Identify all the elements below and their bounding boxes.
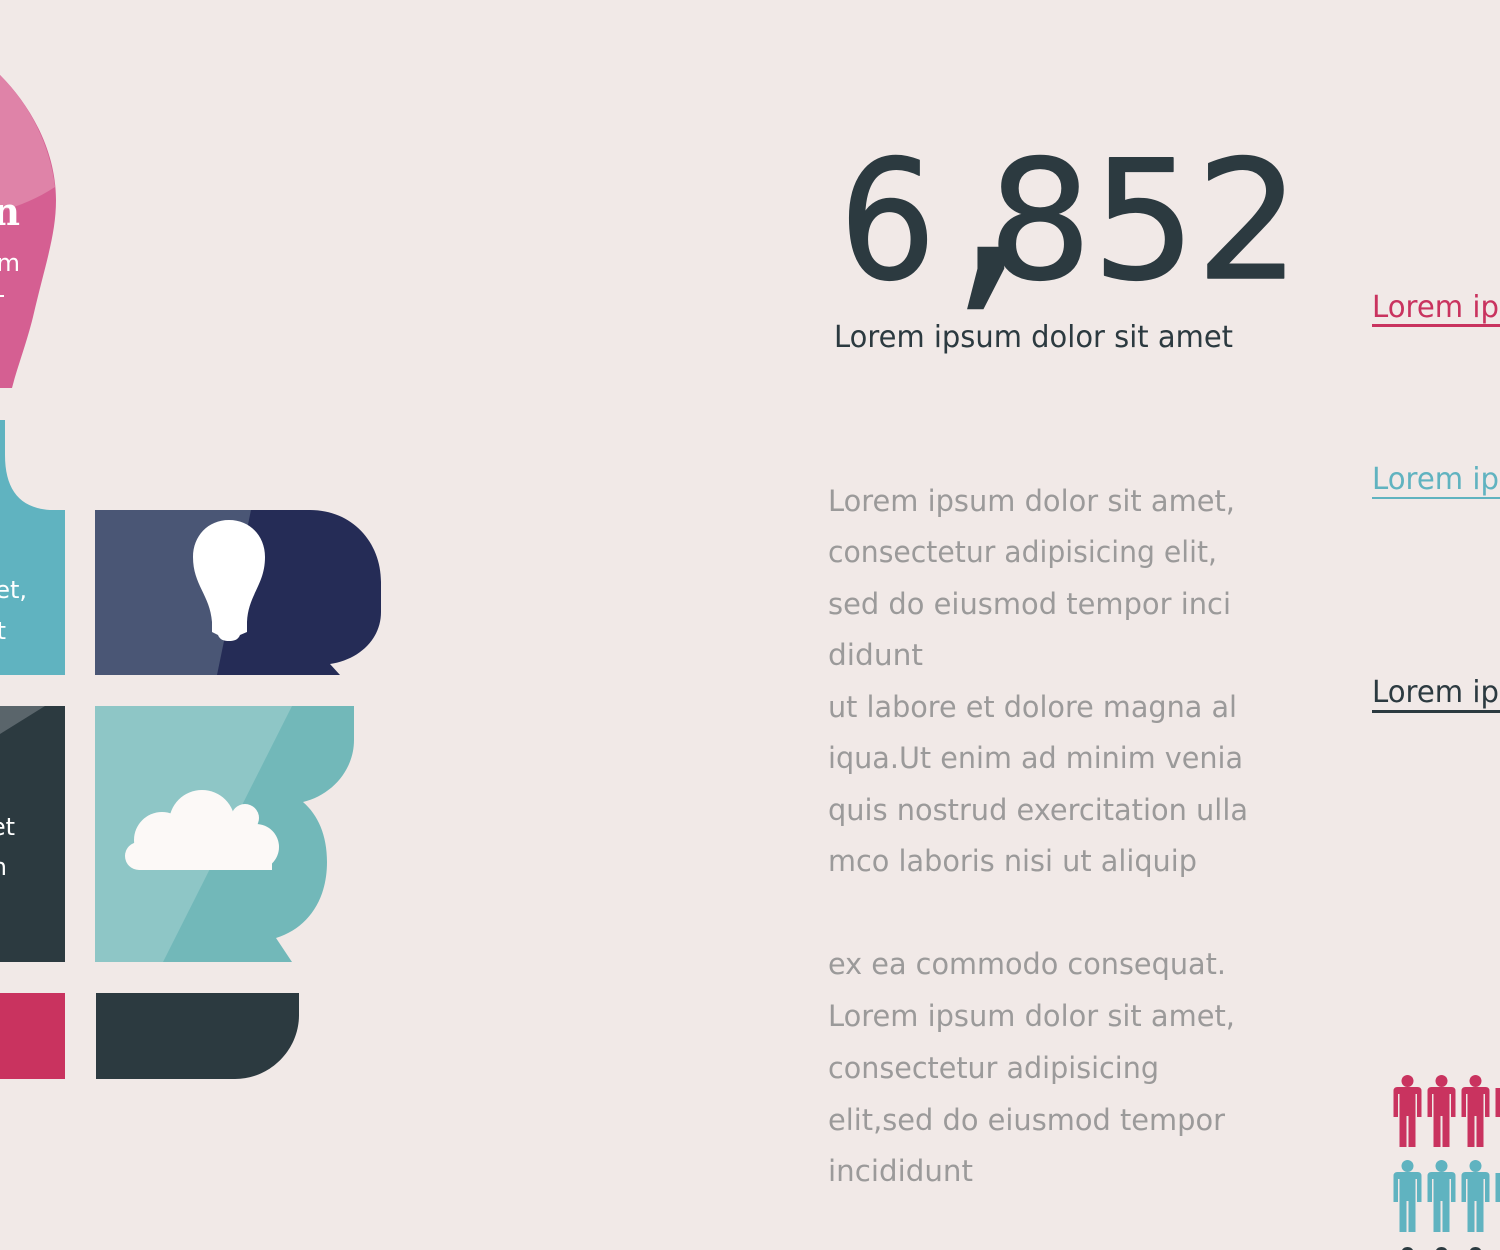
red link label: Lorem ip bbox=[1372, 290, 1499, 325]
body text bbox=[828, 484, 1248, 1188]
body text: ex ea commodo consequat. bbox=[828, 947, 1226, 981]
body text: incididunt bbox=[828, 1154, 973, 1188]
body text: consectetur adipisicing bbox=[828, 1051, 1159, 1085]
icon row: red people bbox=[1394, 1075, 1500, 1147]
icon row: dark people bbox=[1402, 1247, 1481, 1250]
body text: consectetur adipisicing elit, bbox=[828, 535, 1217, 569]
body text: sed do eiusmod tempor inci bbox=[828, 587, 1231, 621]
teal cloud highlight bbox=[95, 706, 292, 962]
link: red bbox=[1372, 290, 1500, 327]
digits eight five two: 852 bbox=[988, 125, 1300, 317]
dark highlight bbox=[0, 706, 45, 734]
icon: light bulb bbox=[193, 520, 265, 641]
body text: didunt bbox=[828, 638, 923, 672]
icon row: teal people bbox=[1394, 1160, 1500, 1232]
red link underline bbox=[1372, 324, 1500, 327]
navy highlight bbox=[95, 510, 251, 675]
bulb highlight bbox=[0, 75, 55, 211]
comma: , bbox=[947, 39, 1030, 341]
panel: dark block bbox=[0, 706, 65, 962]
panel: dark bottom block bbox=[96, 993, 299, 1079]
panel: red block bbox=[0, 993, 65, 1079]
navy shape bbox=[95, 510, 381, 675]
big number bbox=[839, 39, 1300, 341]
body text: quis nostrud exercitation ulla bbox=[828, 793, 1248, 827]
subtitle: Lorem ipsum dolor sit amet bbox=[834, 320, 1233, 355]
body text: elit,sed do eiusmod tempor bbox=[828, 1103, 1225, 1137]
dark link underline bbox=[1372, 710, 1500, 713]
teal link underline bbox=[1372, 497, 1500, 499]
panel: teal block bbox=[0, 420, 65, 675]
body text: Lorem ipsum dolor sit amet, bbox=[828, 484, 1235, 518]
teal cloud shape bbox=[95, 706, 354, 962]
dark link label: Lorem ip bbox=[1372, 675, 1499, 710]
teal shape bbox=[0, 420, 65, 675]
body text: Lorem ipsum dolor sit amet, bbox=[828, 999, 1235, 1033]
body text: iqua.Ut enim ad minim venia bbox=[828, 741, 1243, 775]
panel: navy bulb block bbox=[95, 510, 381, 675]
link: dark bbox=[1372, 675, 1500, 713]
body text: mco laboris nisi ut aliquip bbox=[828, 844, 1197, 878]
icon: cloud bbox=[125, 790, 279, 870]
bulb body bbox=[0, 75, 56, 388]
panel: pink light bulb bbox=[0, 75, 56, 388]
dark shape bbox=[0, 706, 65, 962]
panel: teal cloud block bbox=[95, 706, 354, 962]
link: teal bbox=[1372, 462, 1500, 499]
digit six: 6 bbox=[839, 125, 936, 317]
teal link label: Lorem ip bbox=[1372, 462, 1499, 497]
body text: ut labore et dolore magna al bbox=[828, 690, 1237, 724]
bulb dash bbox=[0, 295, 4, 297]
